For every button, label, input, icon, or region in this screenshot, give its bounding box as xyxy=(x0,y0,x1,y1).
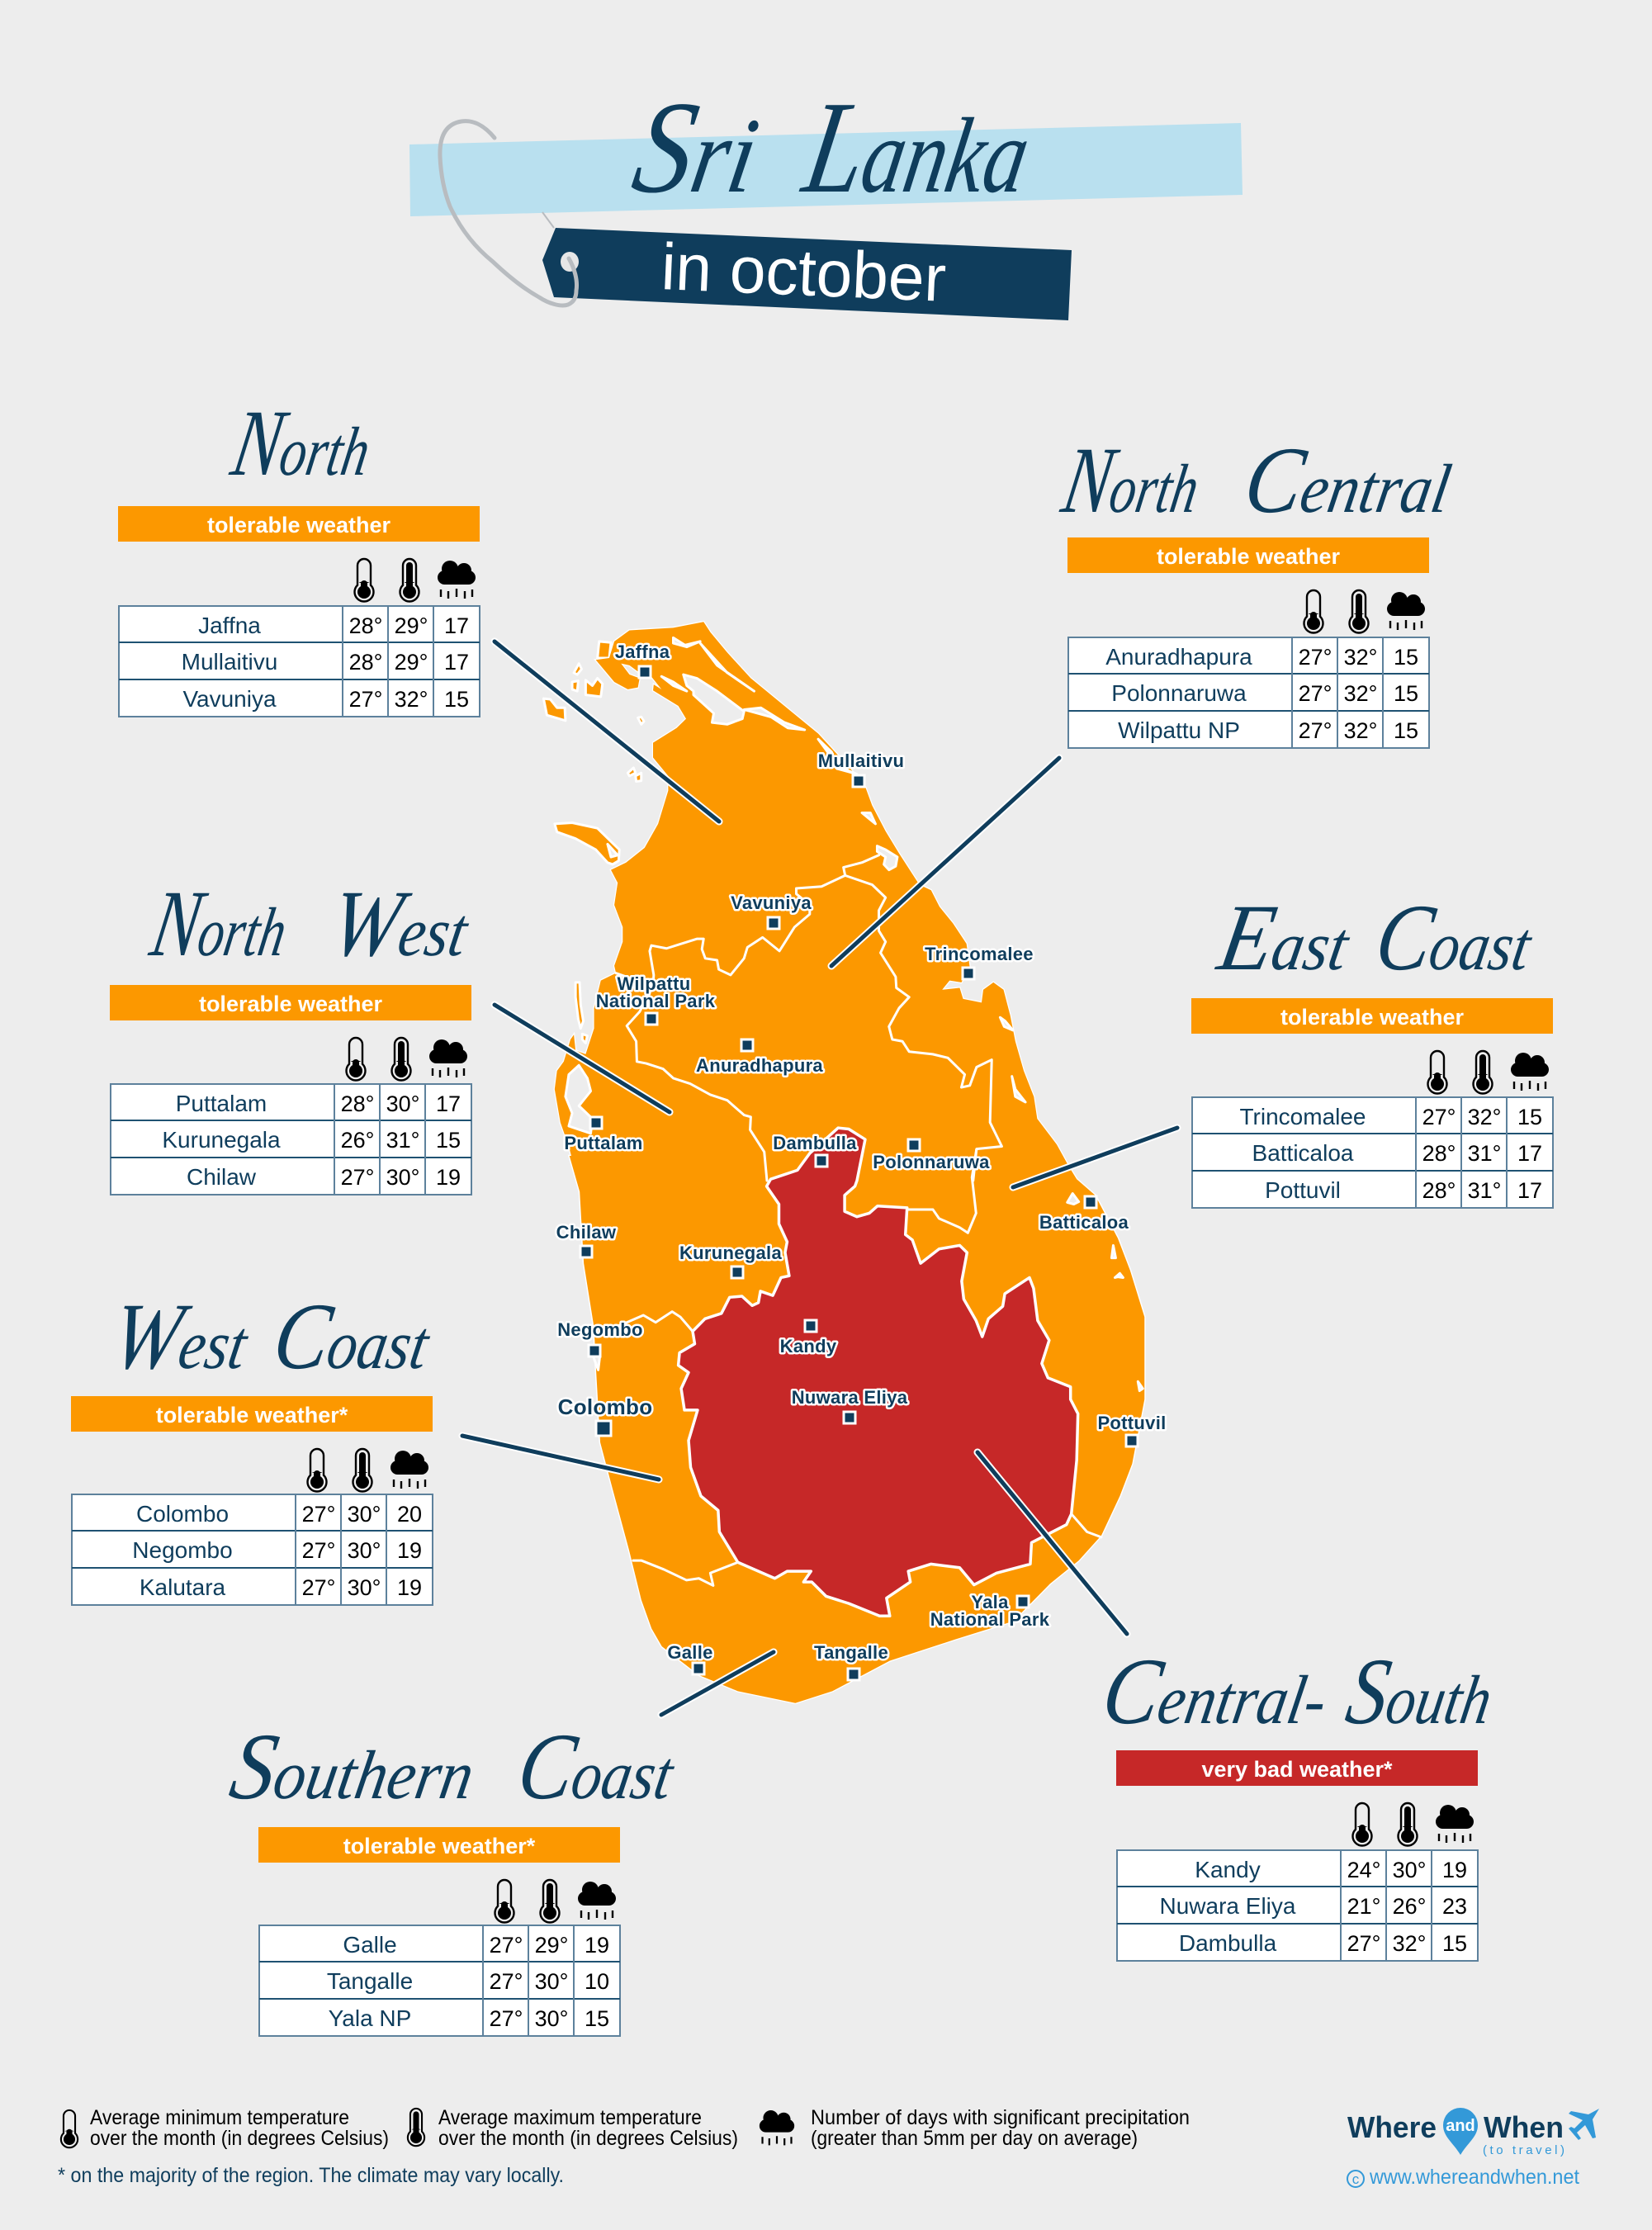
north land mass xyxy=(543,622,1077,1181)
climate table: 17 xyxy=(1517,1178,1542,1203)
climate table: 30° xyxy=(348,1538,381,1563)
climate table: 28° xyxy=(349,650,382,675)
heading: North: North xyxy=(225,391,380,496)
climate table: 27° xyxy=(490,1969,523,1994)
city: Pottuvil: Pottuvil xyxy=(1097,1413,1167,1433)
icon: map pin xyxy=(1443,2108,1478,2155)
climate table: Vavuniya xyxy=(182,686,277,712)
climate table: 21° xyxy=(1347,1894,1380,1919)
city: Dambulla: Dambulla xyxy=(773,1133,857,1153)
city: Batticaloa xyxy=(1039,1196,1129,1233)
climate table: 31° xyxy=(1468,1141,1501,1166)
wordmark: and: and xyxy=(1446,2117,1475,2135)
heading: Southern Coast xyxy=(223,1715,684,1820)
climate table: 27° xyxy=(490,2006,523,2031)
copyright glyph: c xyxy=(1352,2171,1360,2187)
title: Sri Lanka: Sri xyxy=(624,73,770,220)
climate table: 27° xyxy=(1347,1931,1380,1956)
climate table: 27° xyxy=(341,1165,374,1190)
climate table: Polonnaruwa xyxy=(1111,680,1247,706)
heading: West Coast: West xyxy=(104,1285,258,1390)
climate table: 26° xyxy=(341,1128,374,1153)
climate table: 19 xyxy=(397,1575,422,1600)
city: Nuwara Eliya xyxy=(792,1387,908,1423)
climate table: Yala NP xyxy=(329,2005,411,2031)
climate table: 30° xyxy=(1393,1858,1426,1882)
climate table: 15 xyxy=(444,687,469,712)
callout line: Central-South xyxy=(977,1452,1127,1634)
climate table: 31° xyxy=(1468,1178,1501,1203)
icon: rainy days xyxy=(1387,592,1425,630)
city: Wilpattu National Park: National Park xyxy=(596,991,716,1011)
climate table: 15 xyxy=(1394,645,1418,670)
climate table: Batticaloa xyxy=(1252,1140,1354,1166)
icon: minimum temperature xyxy=(1304,590,1323,632)
climate table xyxy=(1192,1097,1553,1208)
weather rating bar xyxy=(71,1396,433,1432)
land join xyxy=(555,622,1144,1703)
climate table: Nuwara Eliya xyxy=(1160,1893,1296,1919)
city: Anuradhapura: Anuradhapura xyxy=(696,1055,823,1076)
icon: maximum temperature xyxy=(391,1038,411,1080)
climate table: Anuradhapura xyxy=(1105,644,1252,670)
city: Puttalam xyxy=(564,1117,643,1153)
climate table: 15 xyxy=(585,2006,609,2031)
legend: precipitation days: (greater than 5mm per day on average) xyxy=(811,2127,1138,2150)
city: Kandy: Kandy xyxy=(780,1336,837,1356)
climate table: 27° xyxy=(349,687,382,712)
city: Vavuniya: Vavuniya xyxy=(731,892,812,913)
climate table: 27° xyxy=(302,1575,335,1600)
climate table: 27° xyxy=(1299,718,1332,743)
callout line: North xyxy=(495,642,719,821)
city: Colombo: Colombo xyxy=(558,1394,652,1419)
city: Jaffna: Jaffna xyxy=(615,642,670,662)
climate table: 27° xyxy=(1299,645,1332,670)
climate table: 28° xyxy=(341,1091,374,1116)
legend: minimum temperature: over the month (in degrees Celsius) xyxy=(90,2127,389,2150)
icon: maximum temperature xyxy=(353,1449,372,1491)
city: Trincomalee: Trincomalee xyxy=(925,944,1034,964)
logo: Where and When xyxy=(1347,2108,1599,2189)
city: Dambulla xyxy=(773,1133,857,1167)
city: Chilaw: Chilaw xyxy=(556,1222,617,1243)
heading: North Central xyxy=(1055,428,1460,533)
icon: airplane xyxy=(1569,2109,1599,2140)
climate table: Dambulla xyxy=(1179,1930,1277,1956)
weather rating bar xyxy=(110,985,471,1020)
climate table: 32° xyxy=(1344,681,1377,706)
climate table xyxy=(72,1494,433,1605)
footnote: * on the majority of the region. The climate may vary locally. xyxy=(58,2164,564,2187)
wordmark: Where: Where xyxy=(1347,2110,1437,2144)
climate table xyxy=(111,1084,471,1195)
climate table: 19 xyxy=(1442,1858,1467,1882)
panel: North West xyxy=(110,872,479,1195)
climate table: 30° xyxy=(348,1502,381,1527)
climate table: 32° xyxy=(1468,1105,1501,1129)
map of Sri Lanka xyxy=(543,622,1144,1703)
climate table: 17 xyxy=(444,613,469,638)
heading: North Central: Central xyxy=(1237,428,1460,533)
heading: Southern Coast: Coast xyxy=(510,1715,684,1820)
climate table: 29° xyxy=(395,650,428,675)
climate table: 19 xyxy=(397,1538,422,1563)
legend: precipitation days xyxy=(760,2106,1190,2150)
climate table: Wilpattu NP xyxy=(1118,717,1240,743)
climate table: Galle xyxy=(343,1932,397,1958)
city: Yala National Park: National Park xyxy=(930,1609,1050,1630)
city: Mullaitivu: Mullaitivu xyxy=(818,750,904,771)
title: Sri Lanka xyxy=(624,73,1042,220)
city: Galle: Galle xyxy=(667,1642,713,1663)
legend: maximum temperature: over the month (in degrees Celsius) xyxy=(438,2127,738,2150)
climate table: 15 xyxy=(1394,718,1418,743)
website: www.whereandwhen.net xyxy=(1369,2166,1579,2189)
climate table: 15 xyxy=(1517,1105,1542,1129)
city: Vavuniya xyxy=(731,892,812,929)
climate table: 30° xyxy=(386,1165,419,1190)
climate table: Tangalle xyxy=(327,1968,413,1994)
central-south region in red xyxy=(679,1128,1078,1616)
title: Sri Lanka: Lanka xyxy=(793,73,1042,220)
climate table: 27° xyxy=(1422,1105,1456,1129)
heading: West Coast: Coast xyxy=(266,1285,440,1390)
panel: Southern Coast xyxy=(223,1715,684,2036)
climate table: Kandy xyxy=(1195,1857,1261,1882)
climate table: Kurunegala xyxy=(162,1127,281,1153)
city: Pottuvil xyxy=(1097,1413,1167,1446)
tagline: (to travel) xyxy=(1483,2143,1564,2157)
heading: East Coast: East xyxy=(1210,886,1360,991)
climate table: Puttalam xyxy=(176,1091,267,1116)
tag hole xyxy=(561,252,579,272)
climate table: Mullaitivu xyxy=(182,649,277,675)
legend: minimum temperature xyxy=(61,2106,389,2150)
heading: North West: West xyxy=(323,872,479,977)
city: Trincomalee xyxy=(925,944,1034,979)
title banner xyxy=(409,73,1243,320)
icon: maximum temperature xyxy=(1399,1803,1417,1846)
climate table: 28° xyxy=(349,613,382,638)
climate table: 23 xyxy=(1442,1894,1467,1919)
climate table: 10 xyxy=(585,1969,609,1994)
panel: West Coast xyxy=(71,1285,440,1605)
icon: minimum temperature xyxy=(495,1880,514,1922)
climate table: Pottuvil xyxy=(1265,1177,1341,1203)
climate table: 27° xyxy=(490,1933,523,1958)
callout line: East Coast xyxy=(1013,1128,1177,1187)
icon: maximum temperature xyxy=(540,1880,560,1922)
climate table: 20 xyxy=(397,1502,422,1527)
climate table: 17 xyxy=(1517,1141,1542,1166)
city: Negombo: Negombo xyxy=(557,1319,643,1340)
climate table: 17 xyxy=(436,1091,461,1116)
weather rating bar xyxy=(1191,998,1553,1034)
climate table xyxy=(119,606,480,717)
legend: maximum temperature xyxy=(408,2106,738,2150)
panel: Central-South xyxy=(1095,1640,1502,1961)
city: Chilaw xyxy=(556,1222,617,1257)
icon: copyright xyxy=(1347,2171,1364,2187)
weather rating bar: tolerable weather xyxy=(1280,1005,1465,1030)
weather rating bar: tolerable weather xyxy=(207,513,391,537)
icon: maximum temperature xyxy=(1473,1051,1493,1093)
climate table: 32° xyxy=(1393,1931,1426,1956)
panel: East Coast xyxy=(1191,886,1553,1208)
climate table: 32° xyxy=(1344,718,1377,743)
city: Kurunegala: Kurunegala xyxy=(679,1243,782,1263)
heading: North West xyxy=(144,872,479,977)
city: Yala National Park: Yala xyxy=(971,1592,1009,1612)
city: Polonnaruwa xyxy=(873,1139,990,1172)
climate table: 32° xyxy=(395,687,428,712)
weather rating bar xyxy=(1116,1750,1478,1786)
dark luggage tag xyxy=(542,228,1072,320)
climate table: 29° xyxy=(535,1933,568,1958)
south land mass xyxy=(570,1156,1144,1703)
city: Kandy xyxy=(780,1320,837,1356)
climate table: 15 xyxy=(436,1128,461,1153)
climate table: Chilaw xyxy=(187,1164,257,1190)
legend: maximum temperature: Average maximum temperature xyxy=(438,2106,702,2129)
climate table xyxy=(259,1925,620,2036)
icon: rainy days xyxy=(1511,1053,1549,1091)
heading: West Coast xyxy=(104,1285,440,1390)
icon: minimum temperature xyxy=(307,1449,327,1491)
climate table: 19 xyxy=(585,1933,609,1958)
climate table: 15 xyxy=(1442,1931,1467,1956)
climate table: 28° xyxy=(1422,1141,1456,1166)
heading: East Coast: Coast xyxy=(1368,886,1542,991)
city: Tangalle: Tangalle xyxy=(814,1642,888,1663)
climate table: 30° xyxy=(386,1091,419,1116)
weather rating bar: tolerable weather* xyxy=(343,1834,536,1858)
icon: maximum temperature xyxy=(1349,590,1369,632)
heading: Central-South: Central- xyxy=(1095,1640,1337,1745)
heading: East Coast xyxy=(1210,886,1542,991)
climate table: Colombo xyxy=(136,1501,229,1527)
city: Puttalam: Puttalam xyxy=(564,1133,643,1153)
tag ring xyxy=(440,121,577,305)
icon: minimum temperature xyxy=(1352,1803,1372,1846)
legend xyxy=(61,2106,1190,2150)
climate table: Negombo xyxy=(132,1537,233,1563)
heading: Southern Coast: Southern xyxy=(223,1715,484,1820)
city: Polonnaruwa: Polonnaruwa xyxy=(873,1152,990,1172)
icon: rainy days xyxy=(578,1882,616,1920)
city: Galle xyxy=(667,1642,713,1674)
climate table: 19 xyxy=(436,1165,461,1190)
heading: North West: North xyxy=(144,872,296,977)
weather rating bar xyxy=(258,1827,620,1863)
city: Negombo xyxy=(557,1319,643,1356)
weather rating bar: tolerable weather xyxy=(199,992,383,1016)
city: Tangalle xyxy=(814,1642,888,1680)
tag string xyxy=(542,212,554,228)
city markers and labels xyxy=(556,642,1167,1680)
heading: Central-South: South xyxy=(1339,1640,1502,1745)
legend: minimum temperature: Average minimum temperature xyxy=(90,2106,349,2129)
climate table: Trincomalee xyxy=(1239,1104,1366,1129)
climate table: Kalutara xyxy=(140,1574,226,1600)
climate table: 15 xyxy=(1394,681,1418,706)
city: Anuradhapura xyxy=(696,1039,823,1076)
city: Colombo xyxy=(558,1394,652,1436)
climate table: 32° xyxy=(1344,645,1377,670)
heading: North Central: North xyxy=(1055,428,1209,533)
city: Mullaitivu xyxy=(818,750,904,787)
weather rating bar: tolerable weather xyxy=(1157,544,1341,569)
callout line: West Coast xyxy=(462,1436,659,1480)
climate table: 30° xyxy=(535,1969,568,1994)
icon: rainy days xyxy=(1436,1805,1474,1843)
city: Wilpattu National Park xyxy=(596,973,716,1025)
climate table xyxy=(1068,637,1429,748)
climate table xyxy=(1117,1850,1478,1961)
northern lagoons and boundaries xyxy=(566,637,1025,1181)
climate table: 26° xyxy=(1393,1894,1426,1919)
heading: Central-South xyxy=(1095,1640,1502,1745)
legend: precipitation days: Number of days with significant precipitation xyxy=(811,2106,1190,2129)
climate table: 28° xyxy=(1422,1178,1456,1203)
subtitle: in october: in october xyxy=(660,230,948,315)
icon: minimum temperature xyxy=(347,1038,365,1080)
icon: maximum temperature xyxy=(400,559,419,601)
city: Nuwara Eliya: Nuwara Eliya xyxy=(792,1387,908,1408)
callout line: North Central xyxy=(831,758,1059,966)
panel: North Central xyxy=(1055,428,1460,748)
panel: North xyxy=(118,391,480,717)
wordmark: When: When xyxy=(1484,2110,1564,2144)
icon: rainy days xyxy=(438,561,476,599)
icon: minimum temperature xyxy=(1428,1051,1446,1093)
climate table: 30° xyxy=(348,1575,381,1600)
climate table: 27° xyxy=(1299,681,1332,706)
callout line: Southern Coast xyxy=(661,1652,774,1715)
climate table: 27° xyxy=(302,1538,335,1563)
climate table: 17 xyxy=(444,650,469,675)
climate table: 27° xyxy=(302,1502,335,1527)
icon: rainy days xyxy=(429,1039,467,1077)
icon: minimum temperature xyxy=(355,559,373,601)
climate table: 24° xyxy=(1347,1858,1380,1882)
weather rating bar: tolerable weather* xyxy=(156,1403,348,1427)
weather rating bar: very bad weather* xyxy=(1201,1757,1393,1782)
icon: rainy days xyxy=(391,1451,428,1489)
southern lagoons, boundaries and central-south region xyxy=(594,1128,1143,1616)
callout line: North West xyxy=(495,1005,670,1112)
climate table: Jaffna xyxy=(198,613,261,638)
city: Batticaloa: Batticaloa xyxy=(1039,1212,1129,1233)
city: Kurunegala xyxy=(679,1243,782,1278)
city: Yala National Park xyxy=(930,1592,1050,1630)
weather rating bar xyxy=(118,506,480,542)
climate table: 29° xyxy=(395,613,428,638)
light blue ribbon xyxy=(409,123,1243,216)
city: Jaffna xyxy=(615,642,670,678)
city: Wilpattu National Park: Wilpattu xyxy=(618,973,690,994)
climate table: 30° xyxy=(535,2006,568,2031)
climate table: 31° xyxy=(386,1128,419,1153)
weather rating bar xyxy=(1067,537,1429,573)
